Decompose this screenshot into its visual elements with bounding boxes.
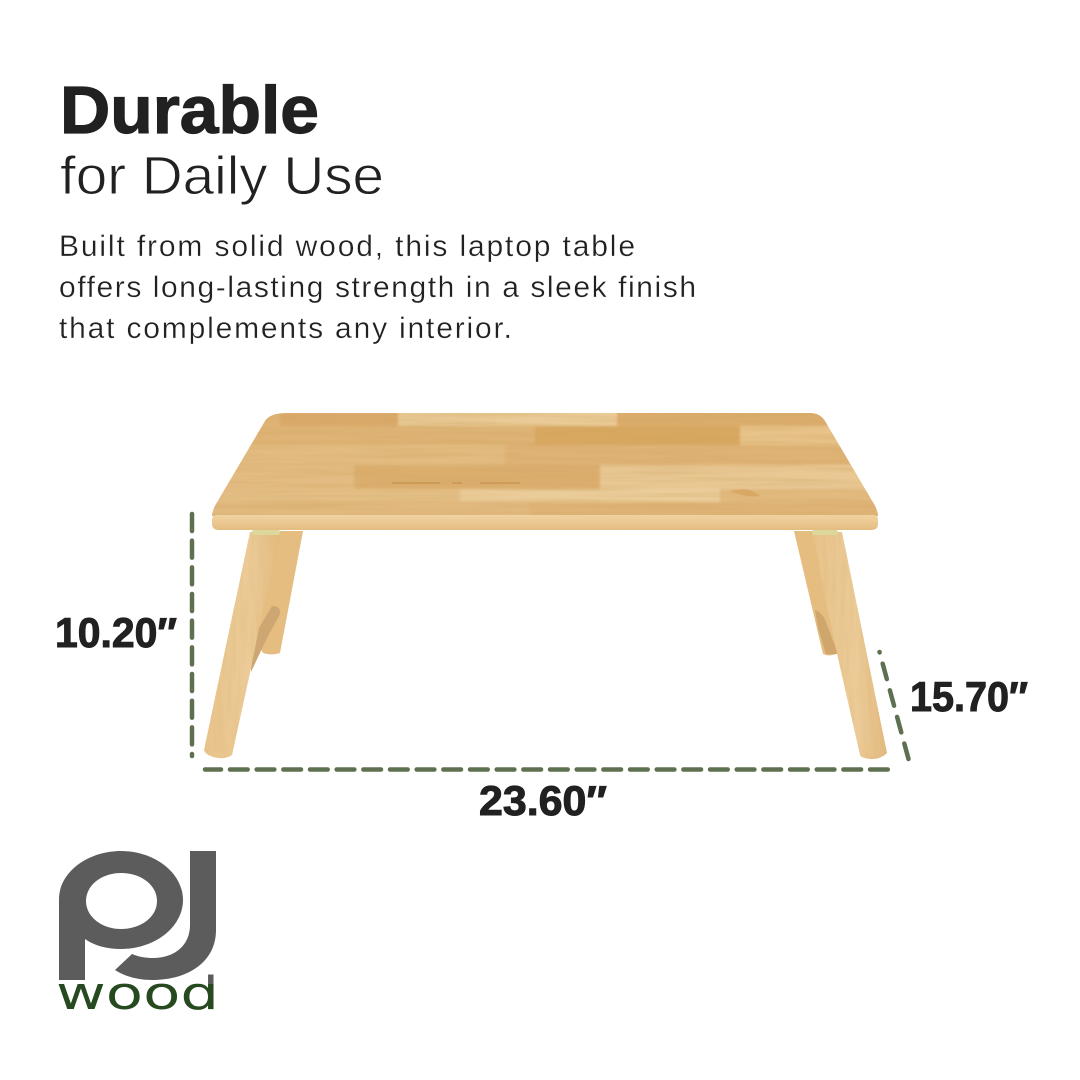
back left leg — [245, 531, 303, 654]
logo: PJ wood — [56, 851, 219, 1020]
front left leg — [204, 532, 268, 758]
left brace — [251, 606, 280, 672]
hinge hardware right — [812, 530, 838, 535]
table front edge — [212, 515, 878, 530]
wood knots — [392, 482, 520, 484]
label: height 10.20: 10.20″ — [55, 609, 177, 656]
label: depth 15.70: 15.70″ — [910, 673, 1028, 720]
back right leg — [794, 531, 845, 656]
body text: that complements any interior. — [59, 312, 512, 345]
label: width 23.60: 23.60″ — [479, 777, 607, 824]
body text — [59, 230, 696, 345]
product photo: wooden laptop table — [195, 405, 897, 762]
subtitle: for Daily Use: for Daily Use — [60, 146, 384, 206]
body text: Built from solid wood, this laptop table — [59, 230, 635, 263]
title: Durable: Durable — [60, 73, 319, 148]
logo word wood: wood — [56, 967, 219, 1020]
dimension line: width — [205, 767, 888, 772]
table top surface — [212, 413, 878, 516]
dimension line: depth — [880, 652, 908, 759]
right brace — [815, 610, 838, 654]
logo letter p — [59, 851, 183, 980]
dimension line: height — [190, 514, 194, 756]
front right leg — [814, 532, 887, 760]
hinge hardware left — [252, 530, 280, 535]
body text: offers long-lasting strength in a sleek finish — [59, 271, 696, 304]
logo letter j — [115, 851, 216, 980]
